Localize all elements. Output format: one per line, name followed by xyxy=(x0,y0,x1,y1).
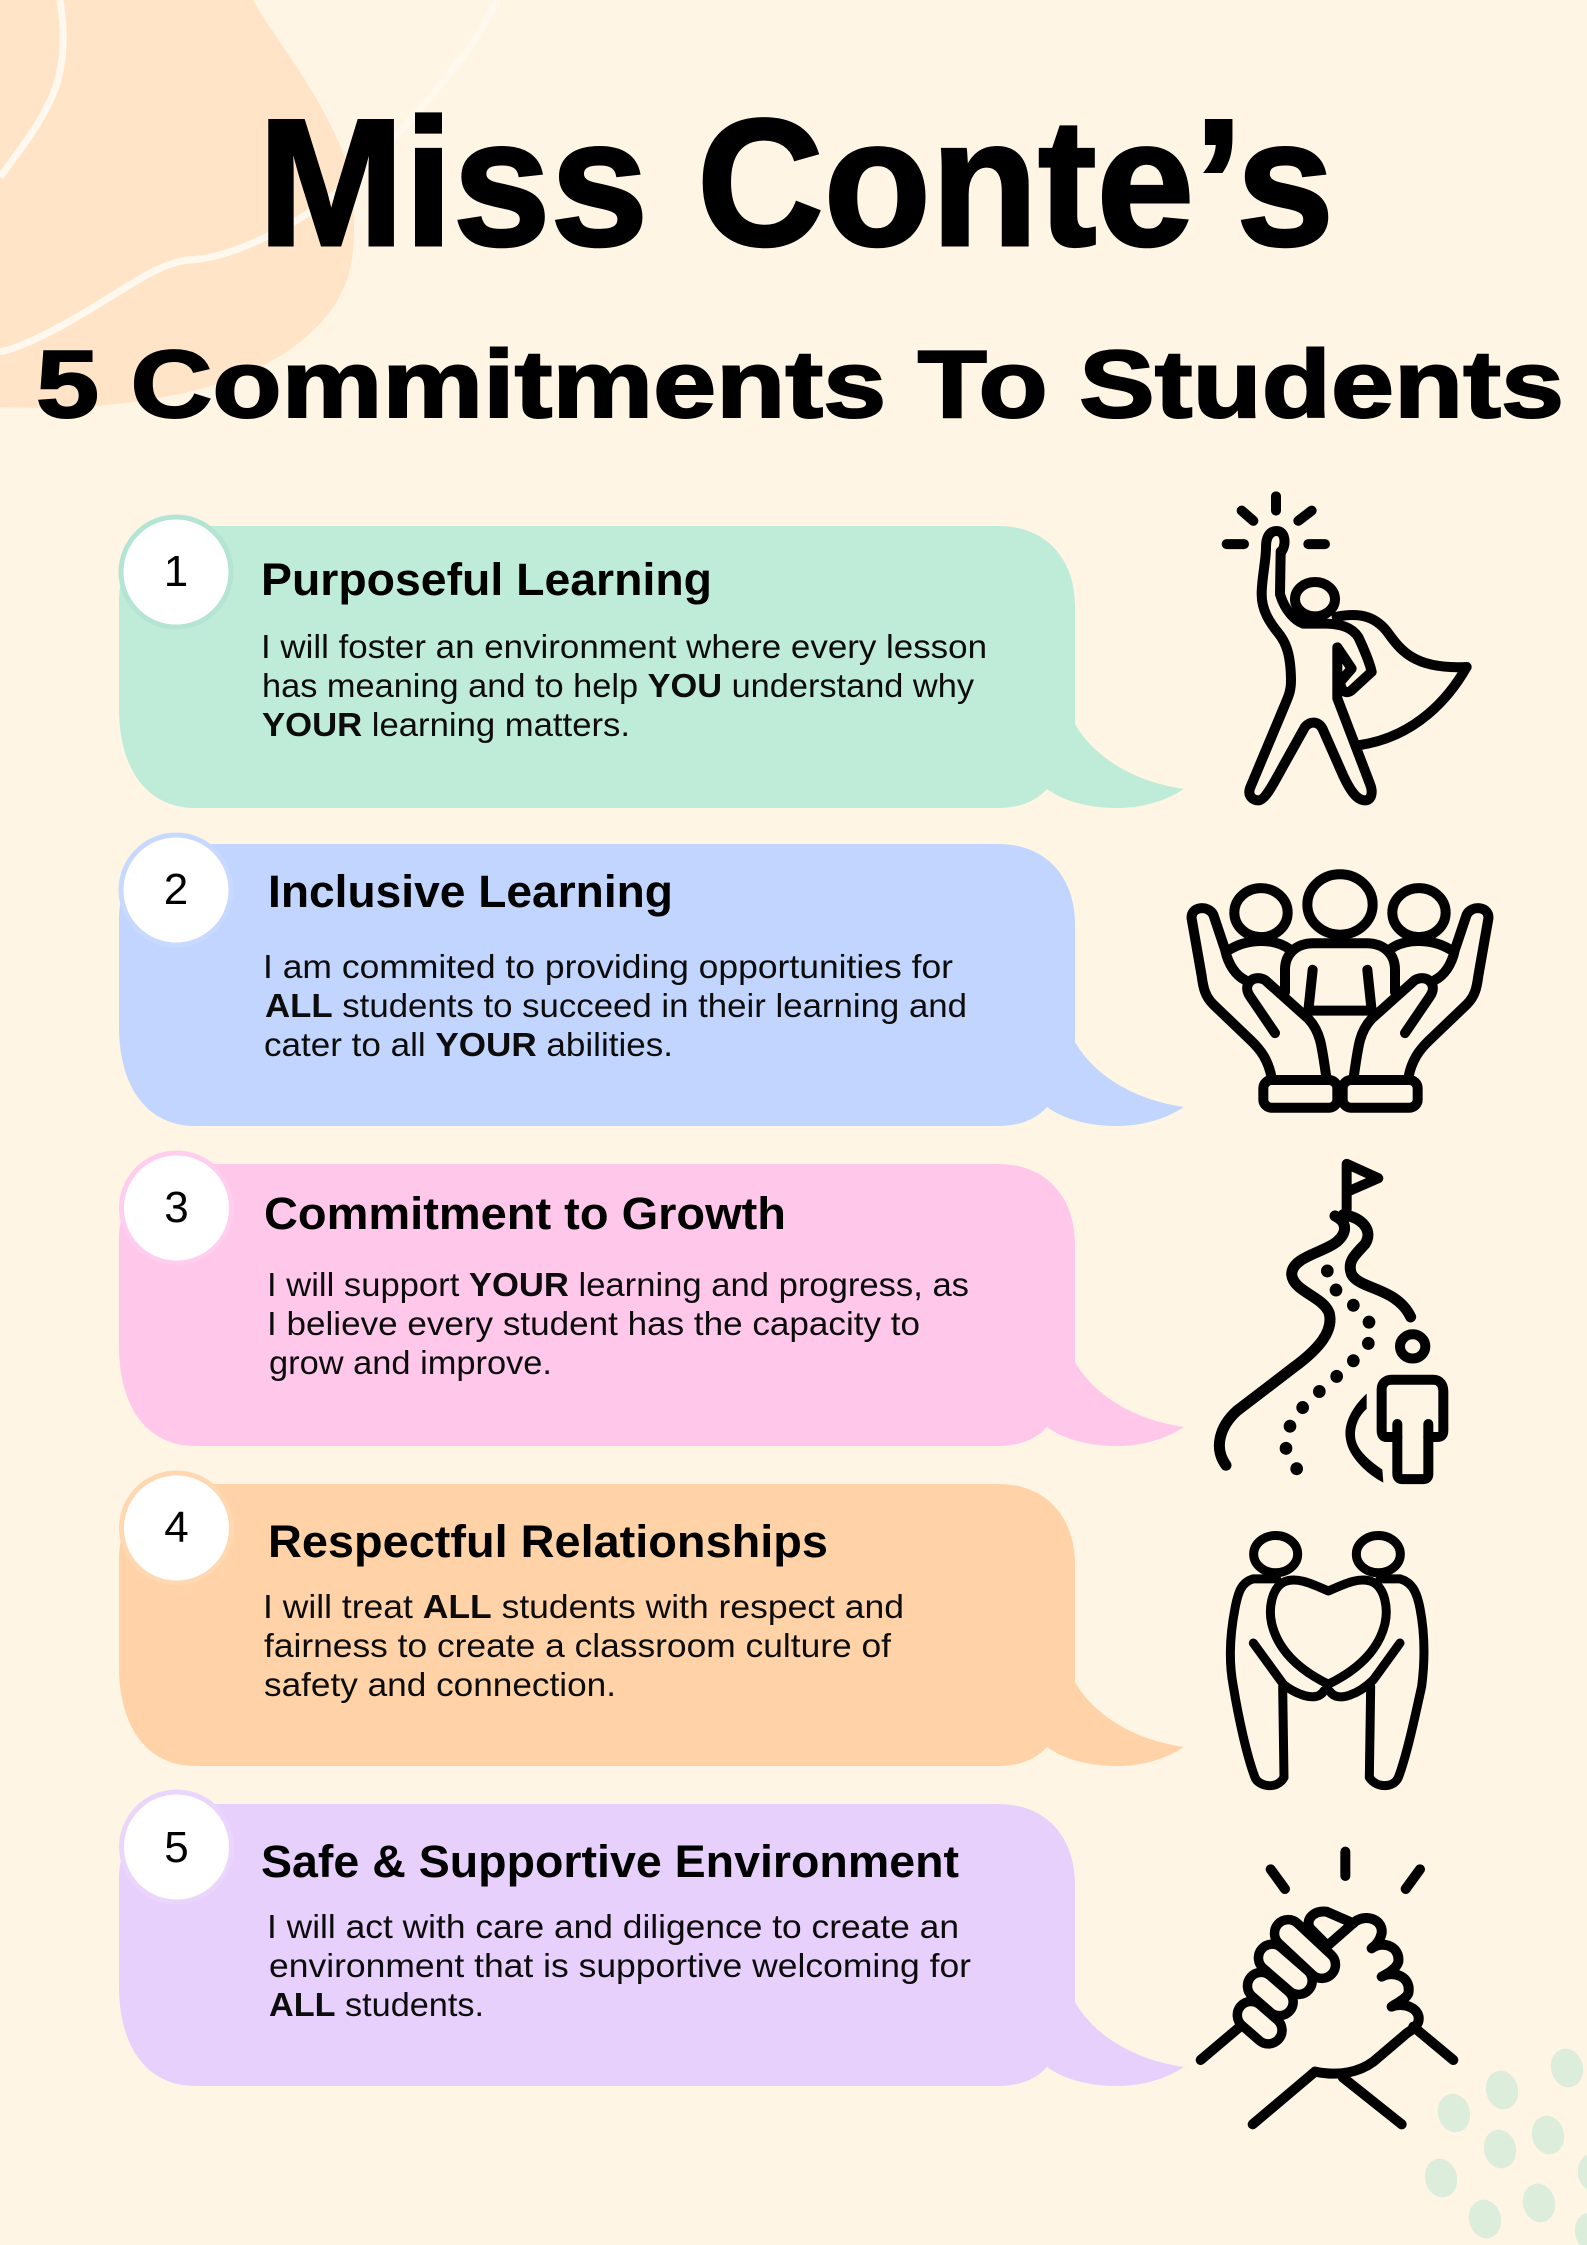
number badge 4 xyxy=(122,1473,232,1583)
number badge 2: 2 xyxy=(164,865,188,914)
icon: clasped hands xyxy=(1201,1852,1453,2124)
body text: I will support YOUR learning and progress, as xyxy=(267,1266,969,1303)
number badge 5: 5 xyxy=(164,1823,189,1872)
decorative green dots xyxy=(1421,2045,1587,2245)
icon: hands holding people xyxy=(1192,874,1488,1108)
body text: ALL students to succeed in their learning and xyxy=(265,987,967,1024)
number badge 2 xyxy=(121,835,231,945)
heading: Respectful Relationships xyxy=(268,1516,828,1567)
speech bubble xyxy=(119,526,1184,808)
speech bubble xyxy=(119,1164,1184,1446)
heading: Purposeful Learning xyxy=(261,554,712,605)
body text: I will foster an environment where every lesson xyxy=(261,628,987,665)
body text: I believe every student has the capacity to xyxy=(267,1305,920,1342)
body text: I will act with care and diligence to create an xyxy=(267,1908,959,1945)
number badge 1 xyxy=(121,517,231,627)
body text: fairness to create a classroom culture of xyxy=(264,1627,892,1664)
number badge 3 xyxy=(122,1153,232,1263)
number badge 1: 1 xyxy=(164,547,188,596)
heading: Safe & Supportive Environment xyxy=(261,1836,959,1887)
icon: two people holding heart xyxy=(1230,1535,1424,1786)
body text: cater to all YOUR abilities. xyxy=(264,1026,673,1063)
body text: has meaning and to help YOU understand why xyxy=(262,667,975,704)
heading: Commitment to Growth xyxy=(264,1188,786,1239)
body text xyxy=(263,1588,904,1703)
body text: environment that is supportive welcoming for xyxy=(269,1947,971,1984)
speech bubble xyxy=(119,1804,1184,2086)
heading: Inclusive Learning xyxy=(268,866,673,917)
card 1: Purposeful Learning xyxy=(119,517,1184,808)
card 2: Inclusive Learning xyxy=(119,835,1184,1126)
speech bubble xyxy=(119,844,1184,1126)
body text: grow and improve. xyxy=(269,1344,552,1381)
body text xyxy=(261,628,987,743)
body text xyxy=(267,1908,971,2023)
body text: I will treat ALL students with respect and xyxy=(263,1588,904,1625)
icon: winding road to flag with person xyxy=(1219,1164,1443,1483)
number badge 3: 3 xyxy=(164,1183,189,1232)
body text: ALL students. xyxy=(269,1986,484,2023)
number badge 5 xyxy=(122,1792,232,1902)
body text: I am commited to providing opportunities for xyxy=(263,948,953,985)
card 4: Respectful Relationships xyxy=(119,1473,1184,1766)
body text xyxy=(263,948,967,1063)
body text: YOUR learning matters. xyxy=(262,706,630,743)
speech bubble xyxy=(119,1484,1184,1766)
body text xyxy=(267,1266,969,1381)
body text: safety and connection. xyxy=(264,1666,616,1703)
subtitle: 5 Commitments To Students xyxy=(36,331,1564,438)
icon: superhero xyxy=(1227,496,1467,800)
title: Miss Conte’s xyxy=(258,82,1334,284)
decorative peach blob with white lines xyxy=(0,0,497,408)
card 5: Safe & Supportive Environment xyxy=(119,1792,1184,2086)
card 3: Commitment to Growth xyxy=(119,1153,1184,1446)
number badge 4: 4 xyxy=(164,1503,189,1552)
